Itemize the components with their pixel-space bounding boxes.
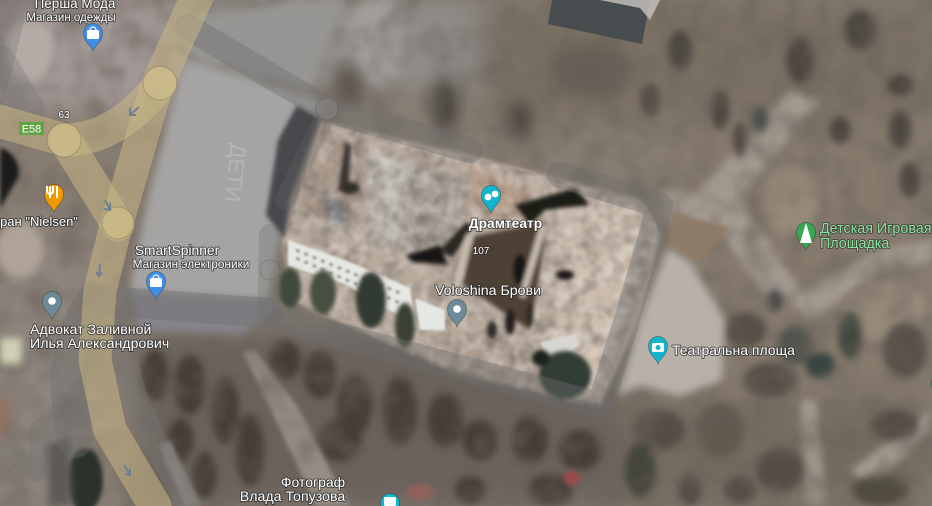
park trees <box>601 10 927 506</box>
label: clothing shop: Магазин одежды <box>26 12 116 24</box>
shadow beside the building <box>266 105 320 238</box>
pin: lawyer <box>42 292 62 319</box>
white facade <box>288 240 580 365</box>
label: photographer: Влада Топузова <box>240 489 345 505</box>
pin: electronics shop <box>146 272 166 299</box>
diagonal park path <box>158 350 580 506</box>
road number 63: 63 <box>58 110 70 121</box>
pin: Voloshina <box>448 300 466 327</box>
label: Voloshina: Voloshina Брови <box>435 283 541 299</box>
smoke haze at top <box>334 0 630 140</box>
label: lawyer: Адвокат Заливной <box>30 322 151 338</box>
label: playground: Площадка <box>820 236 889 252</box>
buildings on the left edge <box>0 20 72 506</box>
label: electronics shop <box>133 243 249 271</box>
pin: photographer <box>380 494 400 506</box>
label: photographer <box>240 474 345 505</box>
route badge E58 <box>19 122 44 136</box>
label: photographer: Фотограф <box>281 474 345 490</box>
route badge E58: E58 <box>22 124 41 136</box>
road direction arrows <box>96 107 139 475</box>
lawn wedge near the plaza <box>668 212 730 262</box>
label: theatre square: Театральна площа <box>672 342 795 358</box>
dark evergreen trees <box>0 148 591 506</box>
pin: partially visible green marker at edge <box>932 374 933 401</box>
park paths and lawns on the right <box>660 90 932 506</box>
pin: drama theatre <box>482 186 500 213</box>
square painted letters: ДЕТИ <box>220 142 251 203</box>
theatre plaza <box>618 248 725 396</box>
yellow highway overlay <box>0 0 200 506</box>
dark roof building at the top <box>548 0 660 44</box>
dark auditorium pit <box>338 142 590 339</box>
city square pavement <box>130 0 345 335</box>
label: restaurant: ран "Nielsen" <box>0 214 78 229</box>
pin: clothing shop <box>84 24 102 51</box>
label: lawyer: Илья Александрович <box>30 336 169 352</box>
label: electronics shop: Магазин электроники <box>133 257 249 271</box>
road number 107: 107 <box>473 246 490 257</box>
asphalt roads <box>0 60 190 506</box>
label: clothing shop <box>26 0 116 24</box>
label: lawyer <box>30 322 169 352</box>
pin: theatre square <box>648 336 668 364</box>
label: playground <box>820 221 931 252</box>
label: playground: Детская Игровая <box>820 221 931 237</box>
grey translucent road overlay <box>0 0 660 470</box>
destroyed theatre building <box>283 120 663 410</box>
rubble texture <box>300 130 640 395</box>
pin: playground <box>796 222 816 250</box>
label: electronics shop: SmartSpinner <box>135 243 220 258</box>
label: drama theatre: Драмтеатр <box>469 216 542 231</box>
pin: restaurant <box>44 184 64 212</box>
junction circles <box>47 66 338 280</box>
bare trees in the lower park <box>141 340 602 506</box>
